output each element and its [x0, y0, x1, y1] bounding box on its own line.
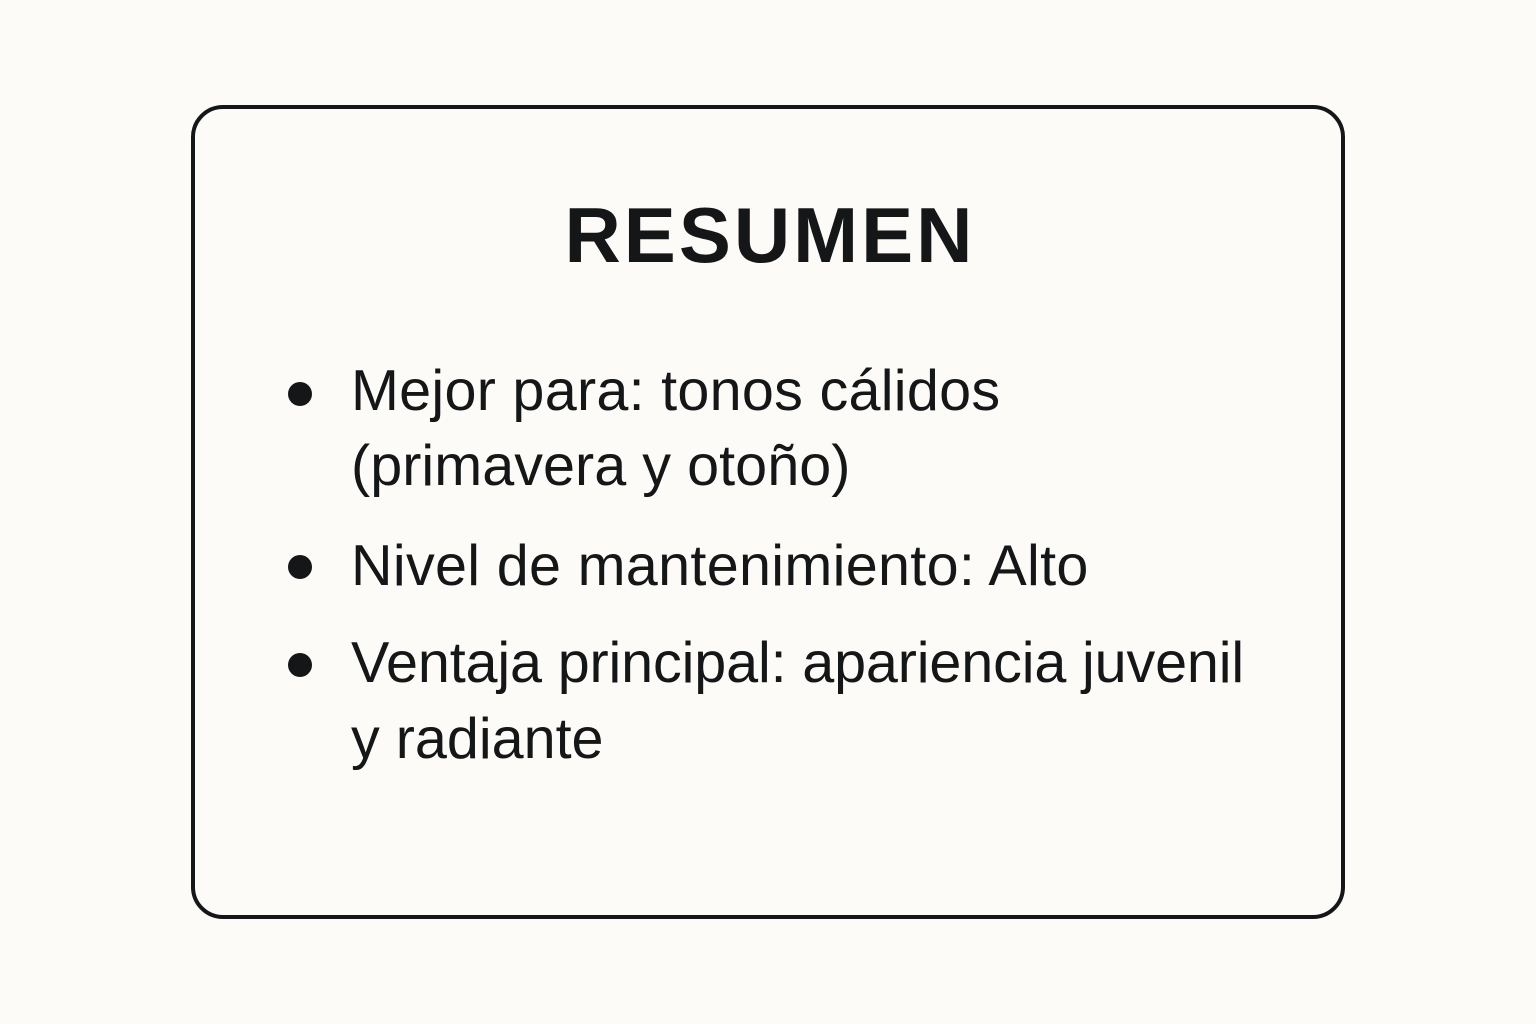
- text: y radiante: y radiante: [351, 707, 604, 771]
- heading: RESUMEN: RESUMEN: [564, 191, 976, 279]
- list item 1: [288, 359, 1000, 498]
- text: ventaja principal: Ventaja principal: apariencia juvenil: [351, 631, 1244, 695]
- text: mejor para: Mejor para: tonos cálidos: [351, 359, 1000, 423]
- text: nivel de mantenimiento: Nivel de mantenimiento: Alto: [351, 534, 1089, 598]
- bullet 1: [288, 382, 312, 406]
- bullet 3: [288, 653, 312, 677]
- panel: summary card: [191, 105, 1345, 919]
- text: primavera y otoño: (primavera y otoño): [351, 434, 850, 498]
- list item 2: [288, 534, 1089, 598]
- list item 3: [288, 631, 1244, 771]
- bullet 2: [288, 555, 312, 579]
